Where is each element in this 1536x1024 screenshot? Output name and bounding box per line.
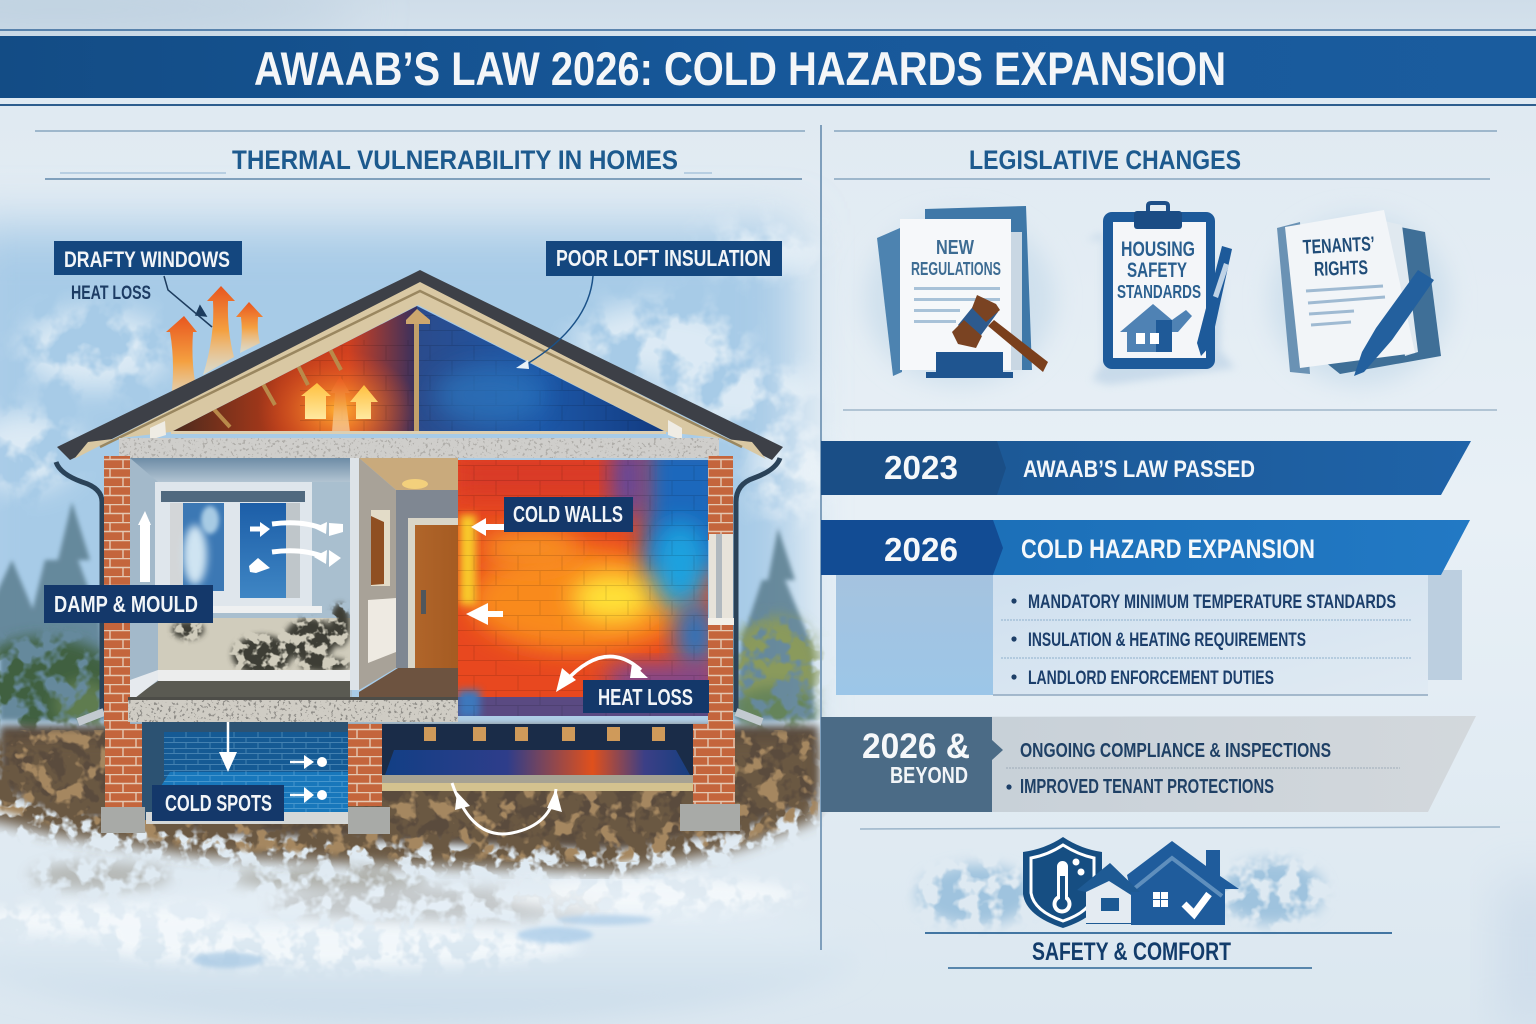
window	[155, 482, 322, 613]
hallway	[350, 458, 458, 698]
leader lines	[164, 276, 593, 369]
cold spot arrows	[219, 722, 327, 803]
pen	[1197, 246, 1232, 356]
timeline row: 2026 cold hazard expansion	[821, 520, 1470, 695]
label: cold spots	[152, 785, 284, 821]
gutters and downpipes	[56, 458, 780, 722]
text: housing safety standards	[1117, 238, 1201, 302]
timeline row: 2026 cold hazard expansion: 2026	[884, 531, 958, 568]
gavel	[926, 295, 1048, 378]
mould patches	[172, 603, 350, 675]
attic cutaway	[173, 306, 664, 431]
text: tenants rights: TENANTS’	[1302, 233, 1375, 259]
text: housing safety standards: HOUSING	[1121, 238, 1195, 261]
safety and comfort emblem	[860, 827, 1500, 968]
sky and clouds backdrop	[0, 224, 830, 745]
title text: AWAAB’S LAW 2026: COLD HAZARDS EXPANSION	[254, 42, 1226, 95]
expansion details panel: INSULATION & HEATING REQUIREMENTS	[1028, 630, 1306, 651]
text: housing safety standards: SAFETY	[1127, 259, 1187, 282]
timeline row: 2026 cold hazard expansion: COLD HAZARD EXPANSION	[1021, 534, 1315, 564]
label: heat loss on wall	[583, 680, 709, 713]
label: cold walls	[504, 497, 633, 532]
tree line	[0, 502, 820, 733]
ground heat-loss arc	[452, 783, 562, 834]
section heading: thermal vulnerability: THERMAL VULNERABILITY IN HOMES	[232, 145, 678, 175]
text: new regulations: NEW	[936, 237, 974, 259]
label: poor loft insulation	[546, 241, 782, 276]
label: poor loft insulation: POOR LOFT INSULATION	[556, 245, 771, 271]
label: drafty windows: DRAFTY WINDOWS	[64, 247, 230, 272]
pen	[1354, 270, 1434, 376]
panel: legislative changes	[821, 131, 1500, 968]
expansion details panel: LANDLORD ENFORCEMENT DUTIES	[1028, 668, 1274, 689]
icon: small house	[1077, 863, 1140, 924]
cold wall arrows	[471, 518, 505, 536]
expansion details panel	[836, 575, 1428, 695]
timeline row: 2026 and beyond: ONGOING COMPLIANCE & INSPECTIONS	[1020, 740, 1331, 762]
frost backdrop	[917, 860, 1324, 925]
label: damp and mould	[44, 585, 213, 623]
heat-loss arc arrows	[570, 654, 642, 677]
ceiling beam	[119, 438, 719, 458]
thermal wall	[458, 460, 708, 716]
icon: large house with check	[1127, 841, 1239, 925]
timeline row: 2023	[821, 441, 1471, 495]
text: tenants rights: RIGHTS	[1314, 257, 1368, 281]
label: heat loss above window: HEAT LOSS	[71, 283, 151, 304]
safety and comfort emblem: SAFETY & COMFORT	[1032, 938, 1231, 966]
heat arrows above roof	[166, 286, 263, 407]
icon: housing safety standards clipboard	[1086, 203, 1235, 385]
ground	[0, 726, 818, 872]
panel: thermal vulnerability in homes	[0, 131, 860, 1023]
illustration: cutaway house	[56, 270, 783, 834]
timeline row: 2026 and beyond	[821, 716, 1476, 812]
label: cold spots: COLD SPOTS	[165, 790, 272, 816]
timeline row: 2023: 2023	[884, 449, 958, 486]
brick piers	[104, 456, 735, 808]
label: drafty windows	[54, 241, 242, 275]
snow foreground	[0, 862, 860, 1023]
text: new regulations	[911, 237, 1001, 279]
text: housing safety standards: STANDARDS	[1117, 282, 1201, 302]
expansion details panel: MANDATORY MINIMUM TEMPERATURE STANDARDS	[1028, 592, 1396, 613]
icon: new regulations document with gavel	[865, 206, 1055, 385]
text: new regulations: REGULATIONS	[911, 259, 1001, 279]
timeline row: 2026 and beyond: 2026 &	[862, 727, 970, 766]
title banner	[0, 30, 1536, 105]
icon: tenants rights document with pen	[1270, 210, 1450, 385]
small house	[1120, 304, 1192, 352]
timeline row: 2026 and beyond: BEYOND	[890, 762, 968, 788]
footings	[101, 804, 740, 834]
draught arrows	[138, 511, 343, 582]
label: damp and mould: DAMP & MOULD	[54, 591, 198, 617]
floor slab	[128, 697, 458, 722]
roof and fascia	[57, 270, 783, 460]
text: tenants rights	[1302, 233, 1375, 281]
timeline row: 2023: AWAAB’S LAW PASSED	[1023, 456, 1255, 483]
timeline row: 2026 and beyond: IMPROVED TENANT PROTECTIONS	[1020, 776, 1274, 798]
label: heat loss on wall: HEAT LOSS	[598, 684, 693, 710]
icon: shield with thermometer	[1023, 837, 1102, 928]
section heading: legislative changes: LEGISLATIVE CHANGES	[969, 145, 1241, 175]
left room	[130, 458, 352, 702]
crawl space and joists	[142, 722, 693, 824]
label: cold walls: COLD WALLS	[513, 501, 623, 527]
